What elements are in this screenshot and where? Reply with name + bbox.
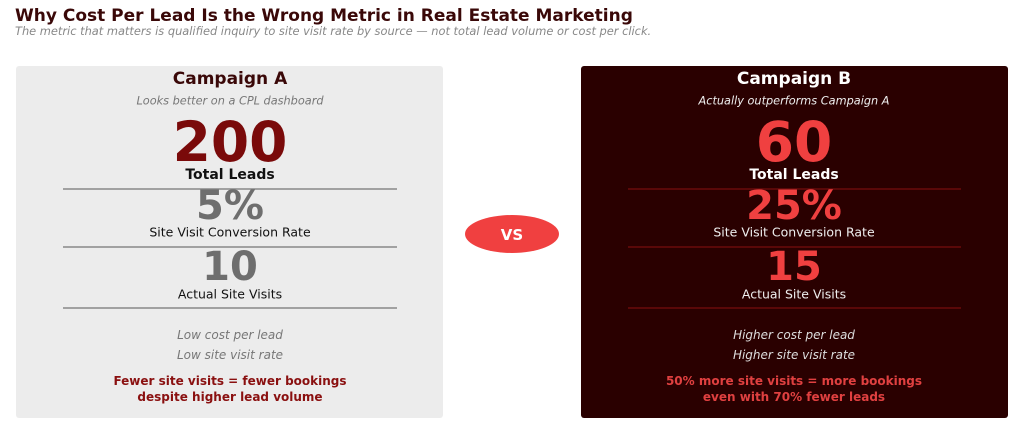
- notes A: Low cost per lead: [177, 328, 283, 342]
- stat: 60 total leads: 60: [756, 110, 832, 174]
- notes B: Higher site visit rate: [733, 348, 855, 362]
- subtitle: The metric that matters is qualified inquiry to site visit rate by source — not total lead volume or cost per click.: [15, 24, 651, 38]
- panel: campaign A: [16, 66, 443, 418]
- stat: 15 site visits: 15: [766, 244, 822, 290]
- conclusion A: [113, 374, 347, 404]
- stat: 10 site visits: [178, 244, 282, 302]
- panel: campaign B: [581, 66, 1008, 418]
- title: Why Cost Per Lead Is the Wrong Metric in Real Estate Marketing: [15, 6, 633, 26]
- conclusion B: even with 70% fewer leads: [703, 390, 885, 404]
- stat: 15 site visits: [742, 244, 846, 302]
- heading: campaign B: Campaign B: [737, 69, 851, 89]
- stat: 10 site visits: 10: [202, 244, 258, 290]
- subheading A: Looks better on a CPL dashboard: [136, 94, 324, 108]
- stat: 5% conversion: 5%: [196, 183, 264, 229]
- conclusion A: despite higher lead volume: [137, 390, 323, 404]
- notes A: [177, 328, 283, 362]
- subheading B: Actually outperforms Campaign A: [698, 94, 889, 108]
- stat: 25% conversion: 25%: [746, 183, 842, 229]
- VS badge: [465, 215, 559, 253]
- stat: 25% conversion: [713, 183, 875, 240]
- heading: campaign A: Campaign A: [173, 69, 288, 89]
- notes B: [733, 328, 855, 362]
- stat: 60 total leads: Total Leads: [749, 167, 839, 183]
- stat: 200 total leads: 200: [173, 110, 287, 174]
- stat: 200 total leads: Total Leads: [185, 167, 275, 183]
- stat: 15 site visits: Actual Site Visits: [742, 286, 846, 302]
- stat: 10 site visits: Actual Site Visits: [178, 286, 282, 302]
- VS badge: VS: [501, 226, 523, 244]
- notes A: Low site visit rate: [177, 348, 283, 362]
- conclusion B: [666, 374, 922, 404]
- stat: 5% conversion: [149, 183, 311, 240]
- conclusion A: Fewer site visits = fewer bookings: [113, 374, 347, 388]
- notes B: Higher cost per lead: [733, 328, 855, 342]
- stat: 25% conversion: Site Visit Conversion Rate: [713, 224, 875, 240]
- conclusion B: 50% more site visits = more bookings: [666, 374, 922, 388]
- stat: 5% conversion: Site Visit Conversion Rate: [149, 224, 311, 240]
